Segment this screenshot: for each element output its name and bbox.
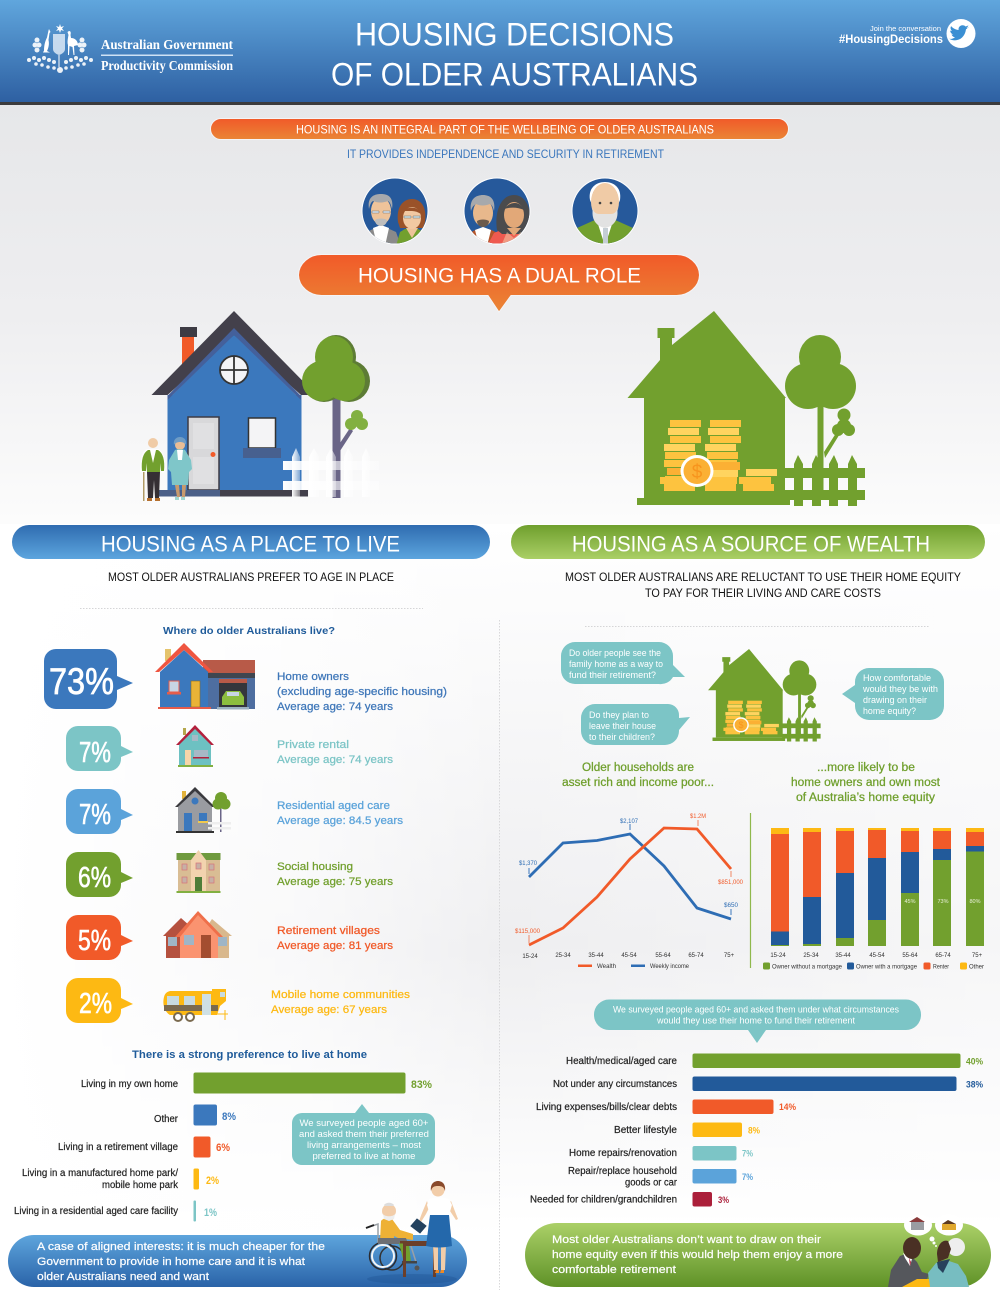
- section heading: source of wealth: HOUSING AS A SOURCE OF WEALTH: [572, 532, 930, 556]
- subheading: reluctant to use equity: MOST OLDER AUSTRALIANS ARE RELUCTANT TO USE THEIR HOME EQUITY: [565, 572, 961, 584]
- callout: survey on preferred living: living arrangements – most: [307, 1140, 421, 1151]
- callout pill: housing has a dual role: [298, 254, 700, 312]
- callout pill: aligned interests: [8, 1235, 467, 1287]
- bar: health 40%: Health/medical/aged care: [566, 1056, 677, 1067]
- age axis: 55-64: [655, 953, 671, 959]
- intro subheading: IT PROVIDES INDEPENDENCE AND SECURITY IN RETIREMENT: [347, 149, 664, 161]
- bar chart: circumstances for using home equity: [530, 1054, 983, 1206]
- bar: manufactured home park 2%: [22, 1168, 219, 1191]
- label: home owners: Home owners: [277, 671, 350, 683]
- badge: 5%: [66, 915, 133, 960]
- row: private rental: [66, 725, 394, 771]
- label: mobile home communities: Mobile home communities: [271, 989, 411, 1001]
- icon: older man with cane: [140, 438, 165, 501]
- label: home owners: Average age: 74 years: [277, 701, 394, 713]
- bar: children 3%: 3%: [718, 1195, 729, 1205]
- icon: blue house with couple: [140, 311, 379, 501]
- subheading: age in place: MOST OLDER AUSTRALIANS PREFER TO AGE IN PLACE: [108, 572, 394, 584]
- bar value labels: 45%: [904, 899, 916, 905]
- callout pill: aligned interests: A case of aligned interests: it is much cheaper for the: [37, 1241, 325, 1253]
- data labels: $115,000: [515, 928, 540, 935]
- callout: survey on preferred living: preferred to live at home: [313, 1151, 415, 1162]
- intro banner: [210, 118, 788, 140]
- bar: not under any 38%: Not under any circumstances: [553, 1079, 677, 1090]
- legend: [763, 962, 984, 970]
- bar: living in my own home 83%: 83%: [411, 1079, 432, 1091]
- row: social housing: [66, 850, 394, 897]
- title: HOUSING DECISIONS: [355, 16, 674, 52]
- twitter hashtag: [839, 26, 943, 46]
- bar: health 40%: 40%: [966, 1056, 983, 1066]
- tablet: [411, 1219, 426, 1233]
- icon: couple portrait 1: [362, 178, 429, 246]
- section heading: place to live: HOUSING AS A PLACE TO LIVE: [101, 532, 400, 556]
- bar: repair household goods 7%: goods or car: [625, 1178, 678, 1188]
- icon: small rental house: [176, 725, 214, 767]
- bar: living expenses 14%: 14%: [779, 1102, 796, 1112]
- icon: small green house with coins: [708, 649, 821, 741]
- bubble: comfort drawing on equity: drawing on their: [863, 695, 927, 705]
- table: [400, 1241, 442, 1277]
- bar: living in my own home 83%: [81, 1072, 432, 1094]
- callout pill: reluctance to draw on equity: comfortable retirement: [552, 1264, 676, 1276]
- callout pill: aligned interests: older Australians need and want: [37, 1271, 209, 1283]
- icon: older woman in teal coat: [168, 437, 192, 500]
- bar: retirement village 6%: [58, 1136, 230, 1158]
- age axis: 65-74: [935, 953, 951, 959]
- badge: 6%: [66, 852, 133, 897]
- badge: 2%: 2%: [79, 988, 112, 1020]
- bubble: leave house to children: to their children?: [589, 732, 655, 742]
- bar: children 3%: Needed for children/grandchildren: [530, 1194, 677, 1206]
- callout: survey on funding retirement: would they use their home to fund their retirement: [656, 1016, 855, 1026]
- bar: retirement village 6%: 6%: [216, 1142, 230, 1154]
- age axis: 45-54: [621, 953, 637, 959]
- badge: 5%: 5%: [78, 925, 111, 957]
- row: retirement villages: [66, 911, 394, 960]
- subheading: reluctant to use equity: TO PAY FOR THEIR LIVING AND CARE COSTS: [645, 588, 881, 600]
- label: home owners: (excluding age-specific housing): [277, 686, 447, 698]
- bar: children 3%: [530, 1192, 729, 1206]
- label: private rental: Private rental: [277, 739, 349, 751]
- legend: Owner without a mortgage: [772, 964, 843, 970]
- section heading: place to live: [12, 525, 490, 559]
- title: OF OLDER AUSTRALIANS: [331, 56, 698, 92]
- callout: survey on preferred living: We surveyed people aged 60+: [300, 1118, 429, 1129]
- logo text: Australian Government Productivity Commission: Productivity Commission: [101, 58, 233, 73]
- twitter hashtag: Join the conversation: [870, 26, 941, 33]
- bar: manufactured home park 2%: mobile home park: [102, 1180, 179, 1191]
- bar: repair household goods 7%: Repair/replace household: [568, 1166, 677, 1177]
- bar: home repairs 7%: 7%: [742, 1148, 753, 1158]
- bubble: family home as funding: fund their retirement?: [569, 670, 656, 680]
- heading: where do older Australians live: Where do older Australians live?: [163, 625, 335, 637]
- badge: 7% blue: 7%: [79, 799, 111, 831]
- bar value labels: 80%: [969, 899, 981, 905]
- label: retirement villages: Average age: 81 years: [277, 940, 394, 952]
- label: social housing: Social housing: [277, 861, 353, 873]
- bar: repair household goods 7%: 7%: [742, 1172, 753, 1182]
- age axis: [770, 953, 983, 959]
- icon: older couple thinking about homes: [888, 1214, 969, 1287]
- bar chart: preferred living arrangements: [14, 1072, 432, 1222]
- bar: better lifestyle 8%: 8%: [748, 1126, 760, 1136]
- bar: living expenses 14%: [536, 1100, 796, 1114]
- bar: home repairs 7%: Home repairs/renovation: [569, 1148, 677, 1159]
- bar: better lifestyle 8%: Better lifestyle: [614, 1125, 677, 1136]
- data labels: $851,000: [718, 879, 743, 886]
- age axis: 55-64: [902, 953, 918, 959]
- label: retirement villages: [277, 925, 394, 952]
- icon: Australian Government crest: [27, 24, 93, 73]
- man in grey suit: [888, 1237, 929, 1287]
- label: private rental: [277, 739, 394, 766]
- callout pill: reluctance to draw on equity: Most older Australians don’t want to draw on their: [552, 1234, 821, 1246]
- badge: 73%: 73%: [49, 661, 114, 702]
- callout pill: reluctance to draw on equity: [525, 1223, 991, 1287]
- bar value labels: 73%: [937, 899, 949, 905]
- logo text: Australian Government Productivity Commission: [101, 37, 233, 73]
- badge: 7% blue: [66, 789, 133, 834]
- data labels: $2,107: [620, 818, 638, 825]
- bar: retirement village 6%: Living in a retirement village: [58, 1142, 178, 1153]
- bubble: family home as funding: [561, 642, 685, 684]
- icon: house with garage: [155, 643, 255, 710]
- callout pill: reluctance to draw on equity: home equity even if this would help them enjoy a more: [552, 1249, 843, 1261]
- label: mobile home communities: [271, 989, 411, 1016]
- age axis: 15-24: [522, 954, 538, 960]
- yellow table: [902, 1279, 968, 1287]
- data labels: [515, 813, 743, 935]
- data labels: $650: [724, 902, 738, 909]
- subheading: reluctant to use equity: [565, 572, 961, 600]
- bubble: comfort drawing on equity: home equity?: [863, 706, 916, 716]
- seated man: [378, 1203, 417, 1264]
- label: residential aged care: Residential aged care: [277, 800, 390, 812]
- badge: 7% teal: 7%: [79, 737, 111, 769]
- heading: more likely to be home owners: home owners and own most: [791, 777, 941, 789]
- age axis: 45-54: [869, 953, 885, 959]
- woman in teal: [928, 1238, 969, 1287]
- cluster: question bubbles around green house: [561, 642, 944, 745]
- age axis: 15-24: [770, 953, 786, 959]
- bar: home repairs 7%: [569, 1146, 753, 1160]
- logo text: Australian Government Productivity Commission: Australian Government: [101, 37, 233, 52]
- icon: grey house with tree: [175, 787, 231, 833]
- bar value labels: [904, 899, 981, 905]
- callout: survey on preferred living: [292, 1104, 435, 1165]
- row: residential aged care: [66, 787, 404, 834]
- bar: residential aged care 1%: 1%: [204, 1207, 217, 1219]
- age axis: 75+: [724, 953, 735, 959]
- icon: green house with coin stacks: [628, 311, 865, 506]
- bar: residential aged care 1%: [14, 1200, 217, 1222]
- heading: asset rich and income poor: asset rich and income poor...: [562, 777, 714, 789]
- badge: 6%: 6%: [78, 862, 111, 894]
- callout: survey on funding retirement: [594, 999, 921, 1043]
- icon: twitter bird: [946, 19, 976, 48]
- line chart: wealth and weekly income by age: [515, 813, 743, 970]
- label: retirement villages: Retirement villages: [277, 925, 381, 937]
- label: home owners: [277, 671, 447, 713]
- legend: Wealth: [597, 964, 616, 970]
- icon: man in wheelchair and carer at table: [366, 1181, 458, 1284]
- badge: 73%: [44, 649, 133, 709]
- callout pill: aligned interests: Government to provide in home care and it is what: [37, 1256, 305, 1268]
- bar: not under any 38%: [553, 1076, 983, 1091]
- bar: health 40%: [566, 1054, 983, 1068]
- bubble: comfort drawing on equity: How comfortable: [863, 673, 931, 683]
- bar: living expenses 14%: Living expenses/bills/clear debts: [536, 1102, 677, 1113]
- wheelchair: [366, 1224, 420, 1270]
- legend: Other: [969, 964, 984, 970]
- age axis: 35-44: [835, 953, 851, 959]
- icon: apartment building: [176, 850, 220, 893]
- age axis: 35-44: [588, 953, 604, 959]
- age axis: 25-34: [803, 953, 819, 959]
- age axis: 75+: [972, 953, 983, 959]
- bubble: comfort drawing on equity: would they be with: [862, 684, 938, 694]
- badge: 2%: [66, 978, 133, 1023]
- twitter hashtag: #HousingDecisions: [839, 32, 943, 46]
- age axis: 65-74: [688, 953, 704, 959]
- heading: preference to live at home: There is a strong preference to live at home: [132, 1049, 367, 1061]
- stacked bar chart: tenure by age: [763, 828, 984, 970]
- label: mobile home communities: Average age: 67 years: [271, 1004, 388, 1016]
- heading: asset rich and income poor: [562, 762, 714, 789]
- bar: other 8%: [154, 1104, 236, 1126]
- bar: manufactured home park 2%: Living in a manufactured home park/: [22, 1168, 178, 1179]
- bar: other 8%: Other: [154, 1114, 179, 1125]
- picket fence: [283, 448, 379, 497]
- section heading: source of wealth: [511, 525, 985, 559]
- icon: cluster of village houses: [163, 911, 232, 958]
- data labels: $1,370: [519, 860, 537, 867]
- callout: survey on funding retirement: We surveyed people aged 60+ and asked them under what circumstances: [613, 1004, 899, 1014]
- bar: better lifestyle 8%: [614, 1122, 760, 1137]
- title: [331, 16, 698, 92]
- tree: [302, 335, 370, 498]
- bubble: comfort drawing on equity: [842, 668, 944, 720]
- intro banner: HOUSING IS AN INTEGRAL PART OF THE WELLBEING OF OLDER AUSTRALIANS: [296, 124, 714, 136]
- legend: Weekly income: [650, 964, 690, 970]
- bar: residential aged care 1%: Living in a residential aged care facility: [14, 1206, 178, 1217]
- thought bubbles with homes: [904, 1214, 963, 1247]
- bar: not under any 38%: 38%: [966, 1080, 983, 1090]
- carer woman: [419, 1181, 458, 1273]
- heading: asset rich and income poor: Older households are: [582, 762, 694, 774]
- label: private rental: Average age: 74 years: [277, 754, 394, 766]
- heading: more likely to be home owners: of Australia’s home equity: [796, 792, 935, 804]
- bubble: leave house to children: [581, 704, 690, 745]
- label: residential aged care: [277, 800, 404, 827]
- legend: Owner with a mortgage: [856, 964, 918, 970]
- badge: 7% teal: [66, 726, 133, 771]
- bubble: leave house to children: Do they plan to: [589, 710, 649, 720]
- bubble: leave house to children: leave their house: [589, 721, 656, 731]
- legend: Renter: [933, 964, 949, 970]
- row: mobile home communities: [66, 978, 411, 1023]
- icon: couple portrait 2: [464, 178, 531, 246]
- label: social housing: Average age: 75 years: [277, 876, 394, 888]
- age axis: [522, 953, 735, 960]
- row: home owners: [44, 643, 447, 713]
- label: social housing: [277, 861, 394, 888]
- heading: more likely to be home owners: [791, 762, 941, 804]
- bar: manufactured home park 2%: 2%: [206, 1175, 219, 1187]
- bar: other 8%: 8%: [222, 1111, 236, 1123]
- bubble: family home as funding: family home as a way to: [569, 659, 663, 669]
- age axis: 25-34: [555, 953, 571, 959]
- data labels: $1.2M: [690, 813, 706, 820]
- bar: repair household goods 7%: [568, 1166, 753, 1188]
- label: residential aged care: Average age: 84.5 years: [277, 815, 404, 827]
- callout pill: housing has a dual role: HOUSING HAS A DUAL ROLE: [358, 264, 641, 288]
- heading: more likely to be home owners: ...more likely to be: [817, 762, 915, 774]
- header banner: [0, 0, 1000, 105]
- bubble: family home as funding: Do older people see the: [569, 648, 661, 658]
- icon: caravan: [163, 989, 228, 1021]
- legend: [578, 964, 690, 970]
- icon: man portrait: [572, 178, 638, 246]
- bar: living in my own home 83%: Living in my own home: [81, 1079, 178, 1090]
- callout: survey on preferred living: and asked them their preferred: [299, 1129, 429, 1140]
